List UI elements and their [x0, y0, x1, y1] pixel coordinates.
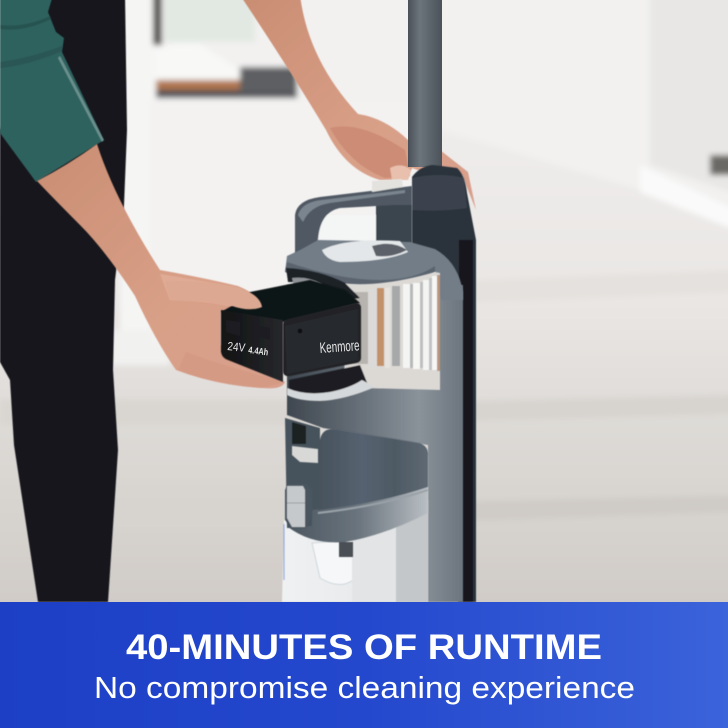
vacuum: release button	[284, 485, 306, 528]
battery: brand logo: Kenmore	[319, 337, 360, 357]
vacuum: white tab	[292, 446, 318, 463]
battery: top housing	[221, 280, 360, 322]
vacuum: clear chrome tank	[286, 268, 440, 401]
vacuum: dark back spine and neck	[412, 165, 476, 602]
person: teal sleeve	[0, 0, 104, 182]
person: left forearm and hand holding battery	[37, 144, 285, 388]
vacuum: pole	[408, 0, 442, 167]
vacuum: dust cap and rim	[285, 418, 428, 557]
vacuum: main body column	[287, 285, 463, 602]
caption banner	[0, 602, 728, 728]
person: right forearm and hand on pole	[240, 0, 476, 210]
banner subheading: No compromise cleaning experience	[94, 670, 635, 705]
battery: side panel	[221, 310, 283, 382]
battery: front face	[283, 303, 361, 376]
battery: capacity label: 4.4Ah	[248, 345, 269, 358]
vacuum: carry handle	[295, 179, 412, 262]
vacuum: upper collar band	[285, 240, 463, 300]
battery pack	[221, 280, 361, 382]
banner heading: 40-MINUTES OF RUNTIME	[126, 628, 602, 667]
battery: capacity label	[228, 342, 268, 356]
battery: capacity label: 24V	[227, 339, 246, 355]
vacuum: clear dust tank	[282, 500, 428, 602]
left hand thumb over battery	[230, 290, 263, 310]
person: black trousers	[0, 0, 127, 602]
vacuum cleaner	[220, 0, 477, 602]
